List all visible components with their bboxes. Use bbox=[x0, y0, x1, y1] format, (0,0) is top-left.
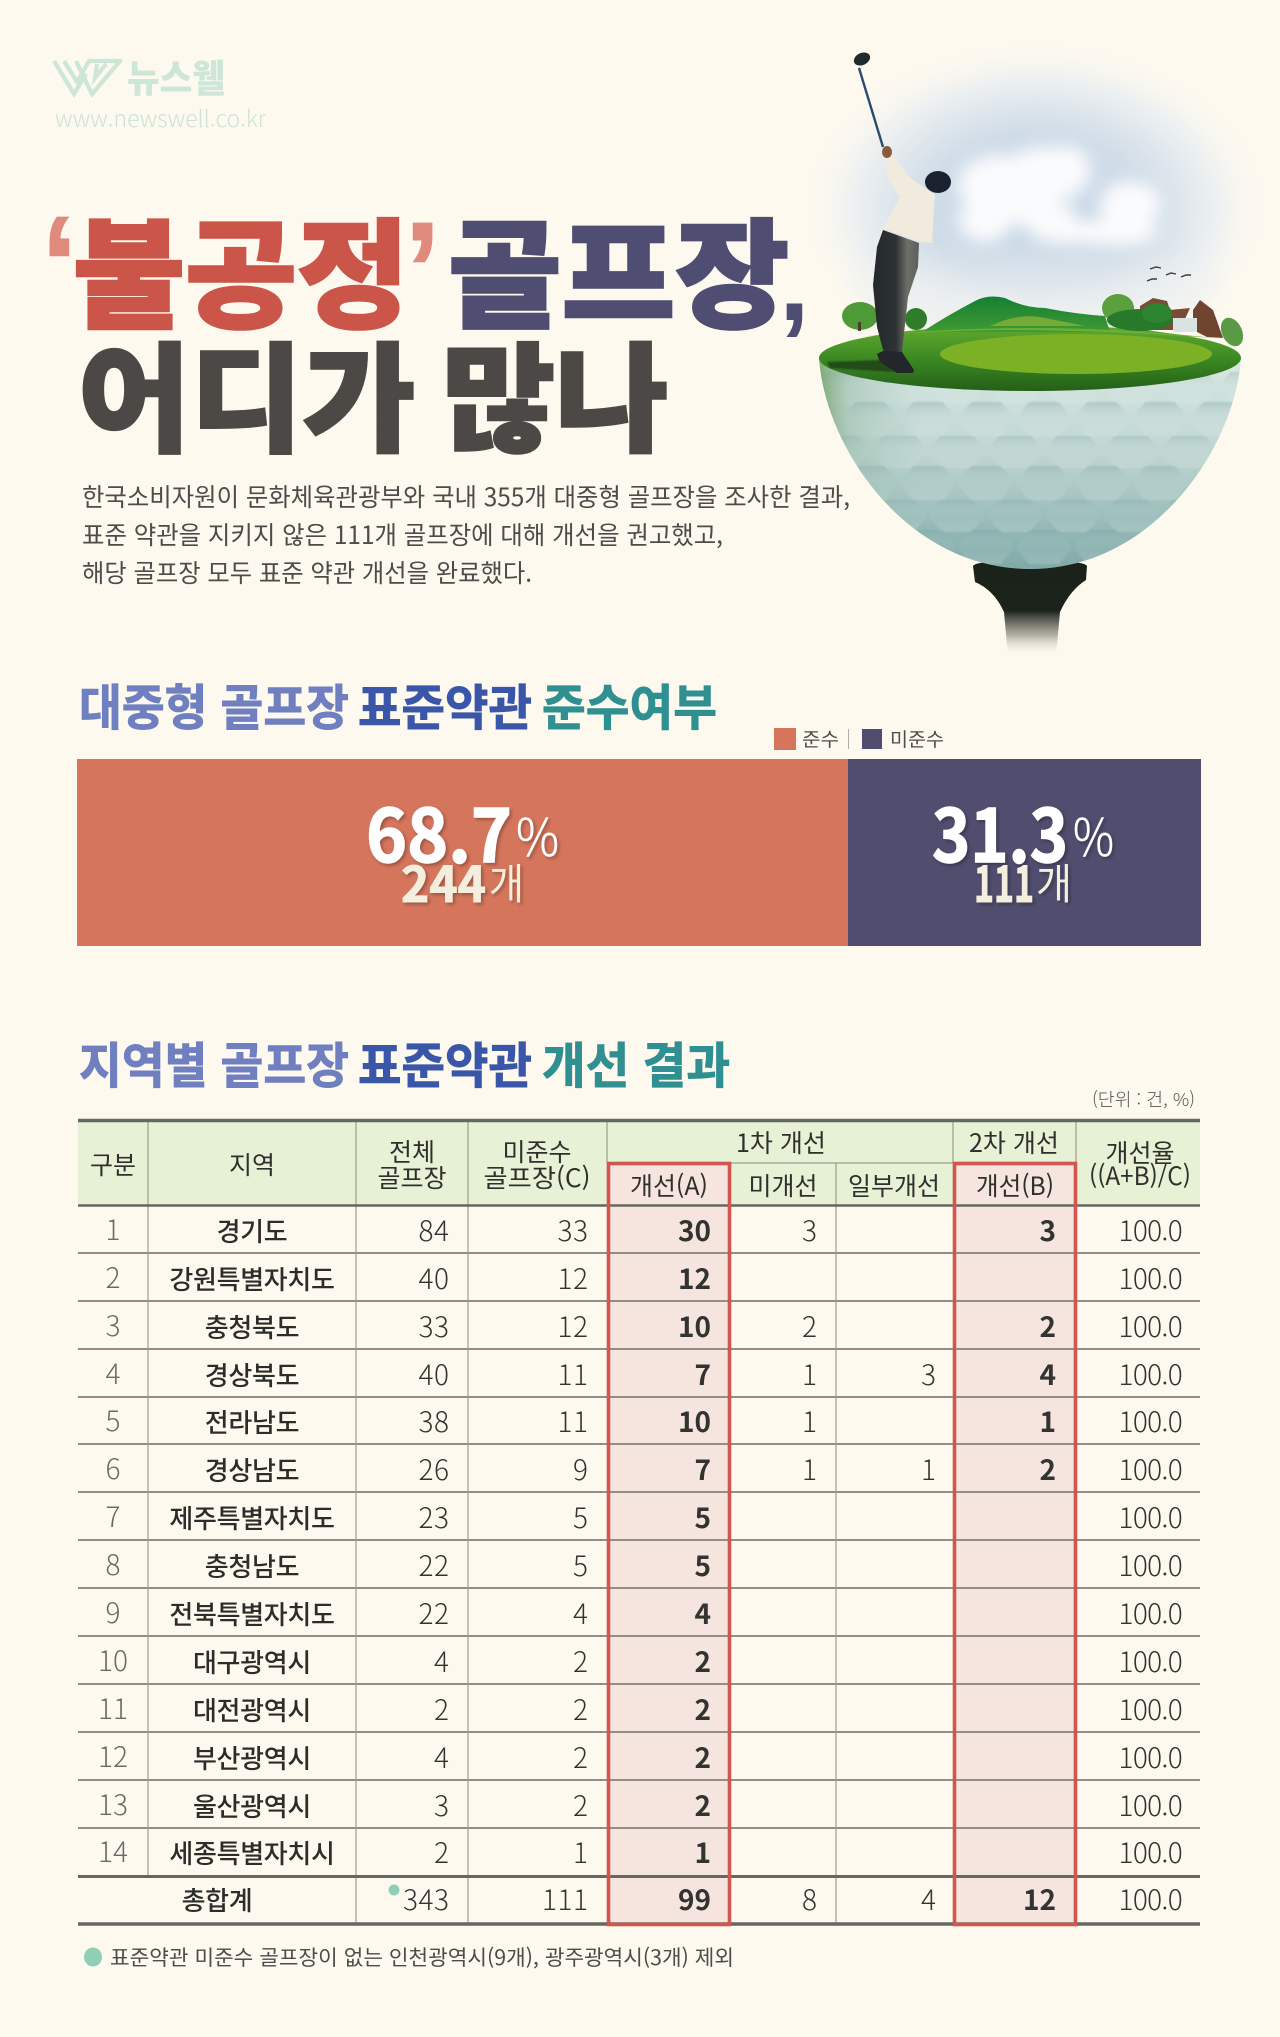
heading: regional results: 개선 결과 bbox=[542, 1027, 730, 1098]
heading: compliance: 대중형 골프장 bbox=[79, 669, 349, 740]
hill highlight bbox=[990, 316, 1085, 326]
table header labels: 골프장(C) bbox=[484, 1159, 590, 1195]
row 12: 2 bbox=[694, 1737, 711, 1777]
logo wordmark: 뉴스웰 bbox=[127, 48, 225, 103]
row 7: 제주특별자치도 bbox=[169, 1499, 335, 1536]
row 11: 대전광역시 bbox=[193, 1691, 311, 1728]
shadow bbox=[827, 360, 895, 372]
row 3: 33 bbox=[419, 1306, 450, 1346]
table header labels: 전체 bbox=[389, 1133, 435, 1169]
row 3: 2 bbox=[802, 1306, 818, 1346]
footnote: 표준약관 미준수 골프장이 없는 인천광역시(9개), 광주광역시(3개) 제외 bbox=[110, 1942, 734, 1972]
row 12: 2 bbox=[573, 1737, 588, 1777]
grass disc bbox=[819, 325, 1241, 391]
row 8: 8 bbox=[106, 1544, 120, 1584]
row 1: 33 bbox=[558, 1210, 588, 1250]
row 1: 100.0 bbox=[1119, 1210, 1182, 1250]
row 4: 7 bbox=[694, 1354, 711, 1394]
total row: 111 bbox=[542, 1879, 588, 1919]
row 6: 100.0 bbox=[1119, 1449, 1182, 1489]
title line 1: 불공정 bbox=[73, 181, 409, 352]
heading: compliance: 준수여부 bbox=[542, 669, 717, 740]
table header labels: 개선(A) bbox=[630, 1167, 708, 1203]
row 2: 40 bbox=[419, 1258, 450, 1298]
intro text block: 표준 약관을 지키지 않은 111개 골프장에 대해 개선을 권고했고, bbox=[82, 516, 723, 552]
row 1: 1 bbox=[106, 1209, 120, 1249]
row 10: 대구광역시 bbox=[193, 1643, 311, 1680]
table header labels: 2차 개선 bbox=[969, 1124, 1059, 1160]
row 1: 3 bbox=[802, 1210, 818, 1250]
table header fill bbox=[78, 1120, 1200, 1205]
row 2: 강원특별자치도 bbox=[169, 1260, 335, 1297]
row 4: 4 bbox=[106, 1353, 121, 1393]
title line 2: 많나 bbox=[442, 305, 668, 476]
row 2: 2 bbox=[106, 1257, 120, 1297]
row 4: 100.0 bbox=[1119, 1354, 1182, 1394]
row 10: 4 bbox=[434, 1641, 450, 1681]
bar: compliant: 244 bbox=[401, 846, 486, 917]
row 13: 13 bbox=[98, 1784, 128, 1824]
row 6: 26 bbox=[419, 1449, 450, 1489]
title bbox=[40, 181, 810, 476]
head bbox=[925, 171, 951, 193]
table header labels: 개선(B) bbox=[976, 1167, 1054, 1203]
title line 1 bbox=[40, 181, 810, 352]
row 5: 100.0 bbox=[1119, 1401, 1182, 1441]
row 13 bbox=[98, 1784, 1182, 1825]
heading: regional results bbox=[79, 1027, 730, 1098]
table header labels: 골프장 bbox=[377, 1159, 447, 1195]
row 5: 38 bbox=[419, 1401, 450, 1441]
golfer bbox=[827, 50, 951, 373]
row 1: 84 bbox=[419, 1210, 450, 1250]
row 2: 12 bbox=[558, 1258, 588, 1298]
row 6: 6 bbox=[106, 1448, 120, 1488]
row 9 bbox=[106, 1592, 1182, 1633]
sky glow bbox=[795, 10, 1275, 354]
row 11: 100.0 bbox=[1119, 1689, 1182, 1729]
row 10: 10 bbox=[98, 1640, 128, 1680]
row 3: 10 bbox=[678, 1306, 711, 1346]
row 4 bbox=[106, 1353, 1182, 1394]
row 10: 100.0 bbox=[1119, 1641, 1182, 1681]
total row bbox=[182, 1879, 1182, 1919]
legend bbox=[774, 725, 944, 752]
intro text block: 한국소비자원이 문화체육관광부와 국내 355개 대중형 골프장을 조사한 결과, bbox=[82, 478, 850, 514]
trees and rocks bbox=[842, 294, 1247, 350]
row 1 bbox=[106, 1209, 1182, 1250]
total row: 총합계 bbox=[182, 1881, 252, 1918]
row 13: 100.0 bbox=[1119, 1785, 1182, 1825]
row 10: 2 bbox=[573, 1641, 588, 1681]
row 9: 22 bbox=[419, 1593, 450, 1633]
horizon haze bbox=[845, 243, 1225, 327]
row 7: 5 bbox=[694, 1497, 711, 1537]
row 8: 100.0 bbox=[1119, 1545, 1182, 1585]
title line 1: ‘ bbox=[40, 186, 79, 343]
row 5: 전라남도 bbox=[205, 1403, 299, 1440]
row 11: 2 bbox=[434, 1689, 450, 1729]
row 11: 2 bbox=[573, 1689, 588, 1729]
bar: non-compliant: % bbox=[1073, 796, 1114, 871]
row 10 bbox=[98, 1640, 1182, 1681]
row 5: 10 bbox=[678, 1401, 711, 1441]
legend: 준수 bbox=[802, 725, 839, 752]
row 3: 12 bbox=[558, 1306, 588, 1346]
row 2 bbox=[106, 1257, 1182, 1298]
bar: non-compliant: 개 bbox=[1036, 851, 1072, 912]
row 14: 1 bbox=[694, 1832, 711, 1872]
bar: compliant: % bbox=[516, 796, 559, 871]
row 2: 12 bbox=[678, 1258, 711, 1298]
title line 2 bbox=[78, 305, 668, 476]
row 6 bbox=[106, 1448, 1182, 1489]
row 13: 2 bbox=[573, 1785, 588, 1825]
icon: W mark bbox=[54, 61, 122, 94]
row 2: 100.0 bbox=[1119, 1258, 1182, 1298]
row 6: 1 bbox=[921, 1449, 936, 1489]
row 9: 100.0 bbox=[1119, 1593, 1182, 1633]
bar: non-compliant bbox=[848, 759, 1201, 946]
legend: 미준수 bbox=[890, 725, 944, 752]
logo url: www.newswell.co.kr bbox=[55, 100, 267, 134]
total row: 99 bbox=[678, 1879, 711, 1919]
row 8 bbox=[106, 1544, 1182, 1585]
hills bbox=[925, 297, 1110, 332]
bar: compliant: 68.7 bbox=[366, 778, 512, 884]
title line 1: , bbox=[779, 221, 810, 344]
row 5: 1 bbox=[1039, 1401, 1056, 1441]
row 7: 100.0 bbox=[1119, 1497, 1182, 1537]
row 9: 4 bbox=[573, 1593, 588, 1633]
row 13: 3 bbox=[434, 1785, 450, 1825]
intro text block bbox=[82, 478, 850, 590]
row 12: 12 bbox=[98, 1736, 128, 1776]
row 3: 100.0 bbox=[1119, 1306, 1182, 1346]
intro text block: 해당 골프장 모두 표준 약관 개선을 완료했다. bbox=[82, 554, 532, 590]
table header labels: 지역 bbox=[229, 1146, 275, 1182]
table grid bbox=[78, 1253, 1200, 1828]
heading: regional results: 지역별 골프장 bbox=[79, 1027, 349, 1098]
row 7: 7 bbox=[106, 1496, 120, 1536]
row 6: 경상남도 bbox=[205, 1451, 299, 1488]
row 6: 9 bbox=[573, 1449, 588, 1489]
fairway fringe bbox=[850, 328, 1215, 338]
club bbox=[859, 68, 883, 147]
row 12: 부산광역시 bbox=[193, 1739, 311, 1776]
row 14: 1 bbox=[573, 1832, 588, 1872]
pants bbox=[873, 230, 919, 352]
row 14: 14 bbox=[98, 1831, 128, 1871]
stacked bar chart: compliance bbox=[77, 759, 1201, 946]
row 6: 7 bbox=[694, 1449, 711, 1489]
row 1: 30 bbox=[678, 1210, 711, 1250]
heading: compliance bbox=[79, 669, 717, 740]
row 4: 경상북도 bbox=[205, 1356, 299, 1393]
row 3: 3 bbox=[106, 1305, 120, 1345]
total row: 8 bbox=[802, 1879, 818, 1919]
row 7: 23 bbox=[419, 1497, 450, 1537]
row 9: 4 bbox=[694, 1593, 711, 1633]
row 13: 2 bbox=[694, 1785, 711, 1825]
footnote marker bbox=[84, 1948, 102, 1966]
bar: non-compliant: 111 bbox=[974, 846, 1034, 917]
row 1: 경기도 bbox=[217, 1212, 287, 1249]
total row: 12 bbox=[1023, 1879, 1056, 1919]
row 12: 100.0 bbox=[1119, 1737, 1182, 1777]
table header labels: 미개선 bbox=[748, 1167, 818, 1203]
table header labels: 미준수 bbox=[502, 1133, 572, 1169]
row 3: 충청북도 bbox=[205, 1308, 299, 1345]
table header labels: 개선율 bbox=[1105, 1134, 1175, 1170]
title line 1: 골프장 bbox=[448, 181, 789, 352]
total row: 4 bbox=[921, 1879, 936, 1919]
row 6: 2 bbox=[1039, 1449, 1056, 1489]
row 5: 1 bbox=[802, 1401, 818, 1441]
row 12 bbox=[98, 1736, 1182, 1777]
unit note: (단위 : 건, %) bbox=[1092, 1086, 1195, 1112]
bar: non-compliant: 31.3 bbox=[932, 778, 1068, 884]
row 5 bbox=[106, 1400, 1182, 1441]
row 5: 11 bbox=[558, 1401, 588, 1441]
marker dot on total bbox=[388, 1884, 400, 1896]
table header labels: 1차 개선 bbox=[736, 1124, 826, 1160]
row 5: 5 bbox=[106, 1400, 120, 1440]
birds bbox=[1147, 267, 1191, 281]
row 14 bbox=[98, 1831, 1182, 1872]
red highlight frame: column A bbox=[608, 1164, 730, 1924]
row 11 bbox=[98, 1688, 1182, 1729]
total row: 100.0 bbox=[1119, 1879, 1182, 1919]
row 11: 2 bbox=[694, 1689, 711, 1729]
hands bbox=[882, 146, 892, 158]
row 9: 9 bbox=[106, 1592, 120, 1632]
row 4: 3 bbox=[921, 1354, 936, 1394]
row 14: 2 bbox=[434, 1832, 450, 1872]
row 14: 세종특별자치시 bbox=[169, 1834, 335, 1871]
row 4: 4 bbox=[1039, 1354, 1056, 1394]
row 12: 4 bbox=[434, 1737, 450, 1777]
title line 1: ’ bbox=[403, 192, 442, 349]
row 7: 5 bbox=[573, 1497, 588, 1537]
row 11: 11 bbox=[98, 1688, 128, 1728]
total row: 343 bbox=[403, 1879, 450, 1919]
golf tee bbox=[973, 562, 1087, 656]
fairway bbox=[940, 334, 1212, 374]
row 6: 1 bbox=[802, 1449, 818, 1489]
row 8: 충청남도 bbox=[205, 1547, 299, 1584]
golf ball half bbox=[815, 355, 1245, 571]
table header labels: 구분 bbox=[90, 1146, 136, 1182]
bar: compliant: 개 bbox=[489, 851, 524, 912]
heading: compliance: 표준약관 bbox=[358, 669, 532, 740]
row 3: 2 bbox=[1039, 1306, 1056, 1346]
highlighted columns fill bbox=[607, 1163, 1077, 1925]
row 8: 5 bbox=[573, 1545, 588, 1585]
row 4: 1 bbox=[802, 1354, 818, 1394]
red highlight frame: column B bbox=[954, 1164, 1076, 1924]
row 7 bbox=[106, 1496, 1182, 1537]
row 10: 2 bbox=[694, 1641, 711, 1681]
row 3 bbox=[106, 1305, 1182, 1346]
row 8: 5 bbox=[694, 1545, 711, 1585]
row 14: 100.0 bbox=[1119, 1832, 1182, 1872]
table header labels: ((A+B)/C) bbox=[1089, 1157, 1191, 1193]
bar: compliant bbox=[77, 759, 848, 946]
row 1: 3 bbox=[1039, 1210, 1056, 1250]
row 8: 22 bbox=[419, 1545, 450, 1585]
illustration: golfer on golf ball bbox=[819, 52, 1244, 650]
shirt bbox=[883, 148, 935, 243]
logo: newswell bbox=[54, 48, 267, 134]
row 13: 울산광역시 bbox=[193, 1787, 311, 1824]
row 4: 11 bbox=[558, 1354, 588, 1394]
table: regional results bbox=[78, 1120, 1200, 1925]
table header labels: 일부개선 bbox=[848, 1167, 940, 1203]
title line 2: 어디가 bbox=[78, 305, 415, 476]
heading: regional results: 표준약관 bbox=[358, 1027, 532, 1098]
row 9: 전북특별자치도 bbox=[169, 1595, 335, 1632]
clouds bbox=[958, 146, 1160, 246]
row 4: 40 bbox=[419, 1354, 450, 1394]
table header labels bbox=[90, 1124, 1191, 1203]
shoe bbox=[877, 350, 914, 373]
